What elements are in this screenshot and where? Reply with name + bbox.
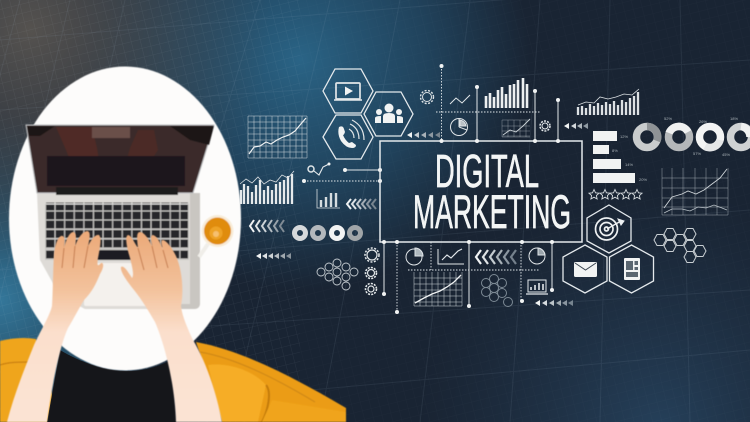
horizontal bars right: 8% bbox=[612, 148, 618, 153]
mini grid chart top bbox=[502, 119, 530, 137]
donut percentage labels: 18% bbox=[730, 116, 738, 121]
arrows above title box bbox=[407, 132, 440, 138]
target glyph bbox=[596, 218, 624, 240]
video player glyph bbox=[334, 83, 362, 100]
small arrows bottom bbox=[535, 300, 573, 306]
hexagon cluster right bbox=[654, 228, 706, 262]
laptop base bbox=[37, 193, 200, 309]
hexagon icon: tablet bbox=[610, 245, 654, 293]
grid chart bottom bbox=[414, 272, 462, 306]
phone glyph bbox=[338, 120, 364, 148]
hexagon icon: mail bbox=[563, 245, 607, 293]
dark top of person bbox=[47, 350, 176, 422]
right arm and hand bbox=[121, 232, 222, 422]
title frame bbox=[380, 141, 582, 242]
hinge bbox=[56, 187, 178, 195]
donut percentage labels: 26% bbox=[699, 119, 707, 124]
screen reflection bbox=[47, 127, 185, 186]
finger gaps bbox=[138, 246, 168, 270]
horizontal bars right: 12% bbox=[620, 134, 628, 139]
hexagon icon: phone bbox=[323, 115, 373, 159]
tablet glyph bbox=[624, 258, 640, 280]
mini line chart below bbox=[438, 249, 464, 264]
horizontal bars right: 20% bbox=[639, 177, 647, 182]
mini pie below left bbox=[406, 248, 423, 265]
top right bar and line chart bbox=[578, 89, 639, 115]
base edge shading bbox=[158, 193, 200, 309]
donut row right bbox=[636, 126, 750, 148]
title: DIGITAL bbox=[435, 145, 539, 197]
donut percentage labels: 57% bbox=[693, 151, 701, 156]
hexagon icon: video bbox=[323, 69, 373, 113]
arrows right of gear bbox=[564, 123, 588, 129]
left donut row bbox=[294, 228, 360, 238]
line chart right bbox=[662, 168, 728, 215]
trackpad bbox=[84, 263, 158, 306]
connectors above frame bbox=[436, 64, 560, 143]
chevrons below bbox=[476, 250, 516, 264]
laptop bbox=[26, 125, 214, 309]
small arrows left bbox=[256, 253, 291, 259]
hexagon cluster bottom bbox=[482, 274, 512, 306]
gear icon top bbox=[420, 90, 434, 104]
people glyph bbox=[375, 104, 403, 123]
chevrons left bbox=[250, 220, 284, 232]
title: MARKETING bbox=[413, 185, 571, 238]
mini pie below right bbox=[529, 248, 545, 264]
mini pie top bbox=[450, 118, 468, 136]
hexagon icon: target bbox=[587, 205, 631, 253]
white bar chart top bbox=[486, 78, 527, 108]
left arm and hand bbox=[7, 231, 103, 422]
small bar icon bbox=[317, 189, 340, 208]
star rating bbox=[589, 190, 642, 199]
gear icons bbox=[365, 248, 379, 294]
gear icon right of mini chart bbox=[540, 121, 550, 131]
horizontal bars right bbox=[593, 131, 647, 183]
horizontal bars right: 14% bbox=[625, 162, 633, 167]
connectors below frame bbox=[382, 240, 554, 314]
title bbox=[413, 145, 571, 238]
line grid chart left bbox=[248, 116, 307, 158]
laptop mini icon bbox=[526, 280, 548, 294]
small trend icon bbox=[308, 162, 330, 175]
chevrons bbox=[347, 199, 376, 209]
white round table bbox=[9, 66, 241, 370]
screen corner shadows bbox=[27, 126, 214, 145]
donut percentage labels bbox=[664, 116, 738, 157]
donut percentage labels: 52% bbox=[664, 116, 672, 121]
envelope glyph bbox=[574, 262, 597, 277]
screen bbox=[26, 125, 214, 193]
white bar and line chart left bbox=[240, 171, 294, 204]
finger gaps bbox=[62, 246, 88, 268]
yellow armchair bbox=[0, 338, 346, 422]
coffee cup bbox=[199, 215, 234, 257]
hexagon cluster left bbox=[317, 259, 358, 290]
connector lines left bbox=[302, 168, 382, 183]
donut percentage labels: 45% bbox=[722, 152, 730, 157]
keyboard bbox=[45, 204, 189, 260]
hexagon icon: team bbox=[364, 92, 413, 136]
mini trend line bbox=[450, 95, 470, 104]
